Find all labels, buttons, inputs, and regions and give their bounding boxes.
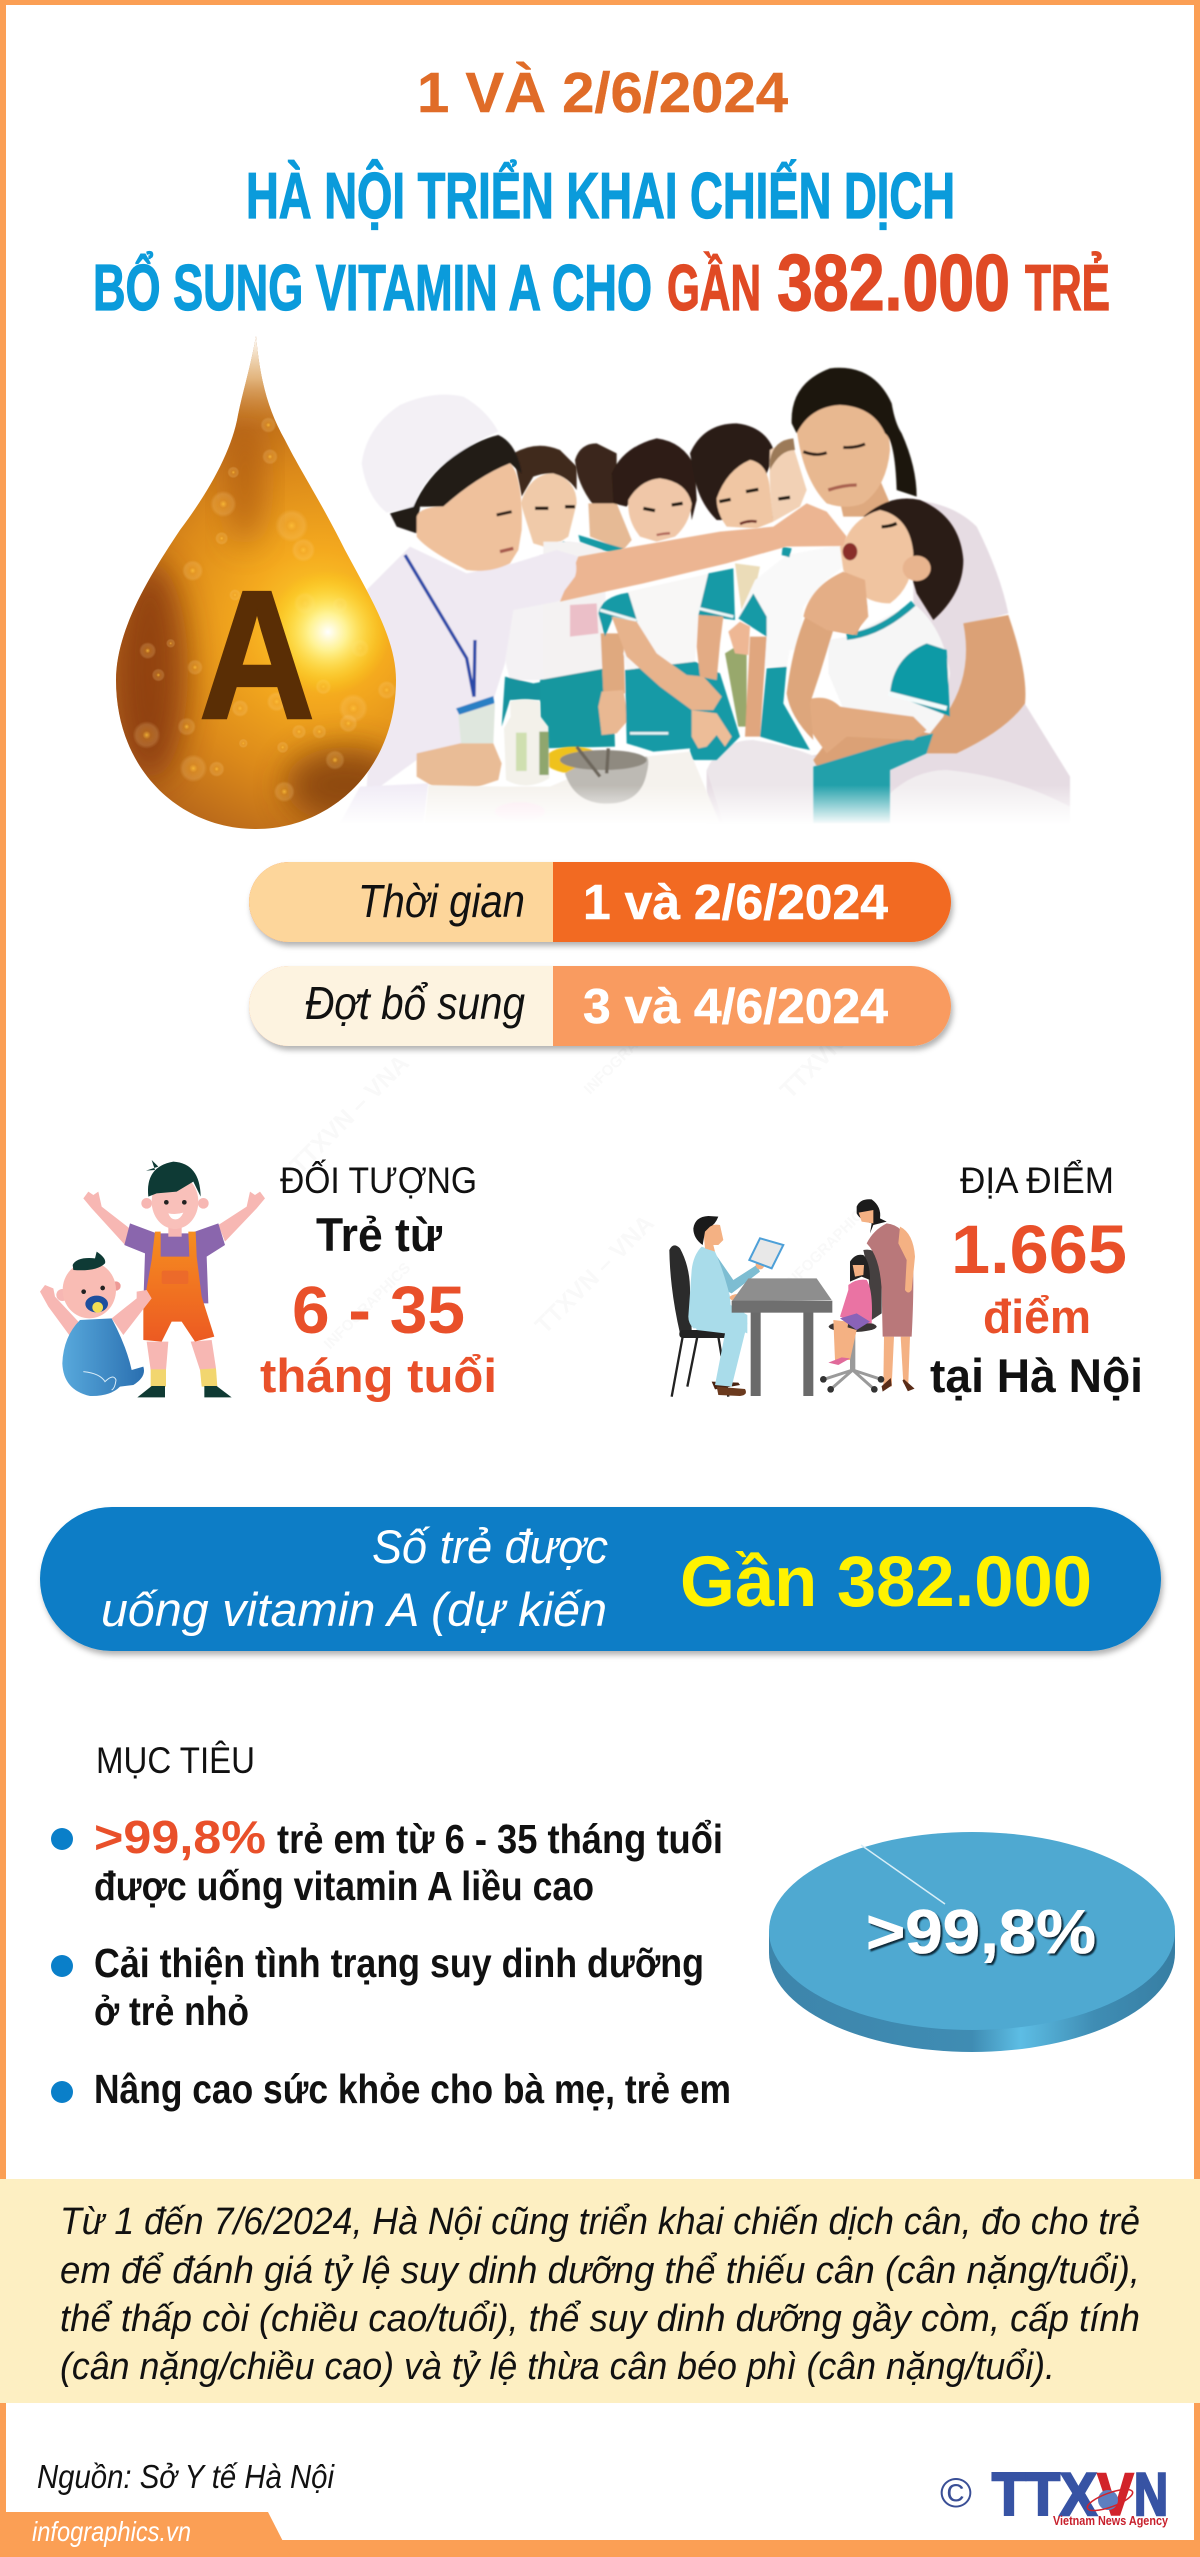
doctor (688, 1216, 783, 1396)
title line 2: TRẺ (1025, 251, 1110, 324)
child 1 (502, 446, 608, 747)
objective 2: Cải thiện tình trạng suy dinh dưỡng (94, 1940, 704, 1986)
title block (93, 61, 1110, 327)
mother head and arms, baby (787, 368, 1025, 823)
note panel: em để đánh giá tỷ lệ suy dinh dưỡng thể thiếu cân (cân nặng/tuổi), (60, 2250, 1140, 2292)
logo: TTXVN: N (1134, 2461, 1168, 2528)
watermarks (285, 975, 905, 1353)
footer band (0, 2512, 1200, 2557)
note panel: Từ 1 đến 7/6/2024, Hà Nội cũng triển khai chiến dịch cân, đo cho trẻ (60, 2201, 1140, 2243)
text: đối tượng: tháng tuổi (260, 1349, 497, 1402)
pill: đợt bổ sung: Đợt bổ sung (305, 977, 525, 1029)
icon: doctor with mother and child (669, 1199, 915, 1397)
text: địa điểm: tại Hà Nội (930, 1349, 1143, 1402)
objective 1: được uống vitamin A liều cao (94, 1863, 594, 1909)
boy (83, 1160, 265, 1397)
pie chart: 99.8% (769, 1832, 1175, 2052)
banner: số trẻ được uống vitamin A: uống vitamin A (dự kiến (101, 1583, 607, 1636)
nurse forearm and hand (540, 503, 847, 603)
text: địa điểm: ĐỊA ĐIỂM (960, 1159, 1114, 1201)
text: đối tượng (260, 1159, 497, 1402)
objective 3: Nâng cao sức khỏe cho bà mẹ, trẻ em (94, 2066, 731, 2112)
child left arm and shirt (540, 542, 628, 748)
text: địa điểm: điểm (983, 1290, 1091, 1343)
watermarks: INFOGRAPHICS (581, 1004, 674, 1098)
note panel: (cân nặng/chiều cao) và tỷ lệ thừa cân béo phì (cân nặng/tuổi). (60, 2346, 1055, 2388)
title line 2 (93, 238, 1110, 327)
objective 1: trẻ em từ 6 - 35 tháng tuổi (277, 1816, 723, 1862)
mother hand at baby's chin (803, 572, 868, 635)
note panel (0, 2179, 1200, 2403)
title line 2: BỔ SUNG VITAMIN A CHO (93, 251, 652, 324)
objective 1 (51, 1811, 723, 1909)
table, bottle, dishes (425, 699, 720, 823)
letter A: A (199, 552, 315, 757)
baby (40, 1252, 152, 1396)
vitamin A drop (116, 336, 396, 829)
mother (857, 1199, 915, 1390)
logo: TTXVN: Vietnam News Agency (1053, 2513, 1169, 2528)
table (732, 1278, 832, 1396)
text: địa điểm (930, 1159, 1143, 1402)
source: Nguồn: Sở Y tế Hà Nội (37, 2458, 335, 2495)
nurse (340, 395, 578, 823)
objective 1: >99,8% (94, 1811, 266, 1863)
text: đối tượng: Trẻ từ (316, 1208, 443, 1261)
watermarks: TTXVN – VNA (530, 1210, 660, 1339)
text: đối tượng: 6 - 35 (292, 1273, 465, 1348)
pill: thời gian: 1 và 2/6/2024 (583, 876, 888, 930)
watermarks: TTXVN – VNA (775, 975, 905, 1104)
photo: nurse giving vitamin A to children (330, 368, 1090, 838)
watermarks: INFOGRAPHICS (321, 1259, 414, 1353)
photo bottom fade (330, 785, 1090, 825)
objective 2: ở trẻ nhỏ (94, 1988, 249, 2034)
pie chart: 99.8%: >99,8% (866, 1898, 1096, 1967)
banner: số trẻ được uống vitamin A: Số trẻ được (372, 1520, 608, 1573)
icon: two children (40, 1160, 265, 1397)
text: địa điểm: 1.665 (951, 1211, 1127, 1288)
footer band: infographics.vn (32, 2516, 191, 2547)
objective 2 (51, 1940, 704, 2034)
children group (540, 423, 843, 760)
text: đối tượng: ĐỐI TƯỢNG (280, 1159, 477, 1201)
heading: mục tiêu: MỤC TIÊU (96, 1740, 255, 1781)
mother body (707, 500, 1070, 823)
watermarks: TTXVN – VNA (285, 1050, 415, 1179)
title line 2: GẦN (667, 251, 761, 324)
child on stool (820, 1255, 884, 1393)
child 4 (738, 438, 843, 750)
banner: số trẻ được uống vitamin A: Gần 382.000 (680, 1543, 1092, 1622)
logo: TTXVN: © (940, 2469, 972, 2516)
logo: TTXVN: V (1097, 2461, 1134, 2528)
objectives list (51, 1811, 731, 2112)
child 3 (690, 423, 775, 727)
chair (669, 1245, 729, 1397)
watermarks: INFOGRAPHICS (781, 1199, 874, 1293)
note panel: thể thấp còi (chiều cao/tuổi), thể suy dinh dưỡng gầy còm, cấp tính (60, 2298, 1140, 2340)
banner: số trẻ được uống vitamin A (40, 1507, 1161, 1651)
logo: TTXVN: TTX (992, 2461, 1097, 2528)
child behind (575, 443, 632, 555)
pill: thời gian (249, 862, 951, 942)
bubbles (133, 417, 396, 802)
pill: đợt bổ sung (249, 966, 951, 1046)
pill: thời gian: Thời gian (358, 875, 525, 927)
date heading: 1 VÀ 2/6/2024 (417, 61, 788, 125)
child 2 (598, 438, 740, 760)
logo: TTXVN (940, 2461, 1169, 2528)
pill: đợt bổ sung: 3 và 4/6/2024 (583, 980, 888, 1034)
title line 2: 382.000 (777, 238, 1010, 327)
